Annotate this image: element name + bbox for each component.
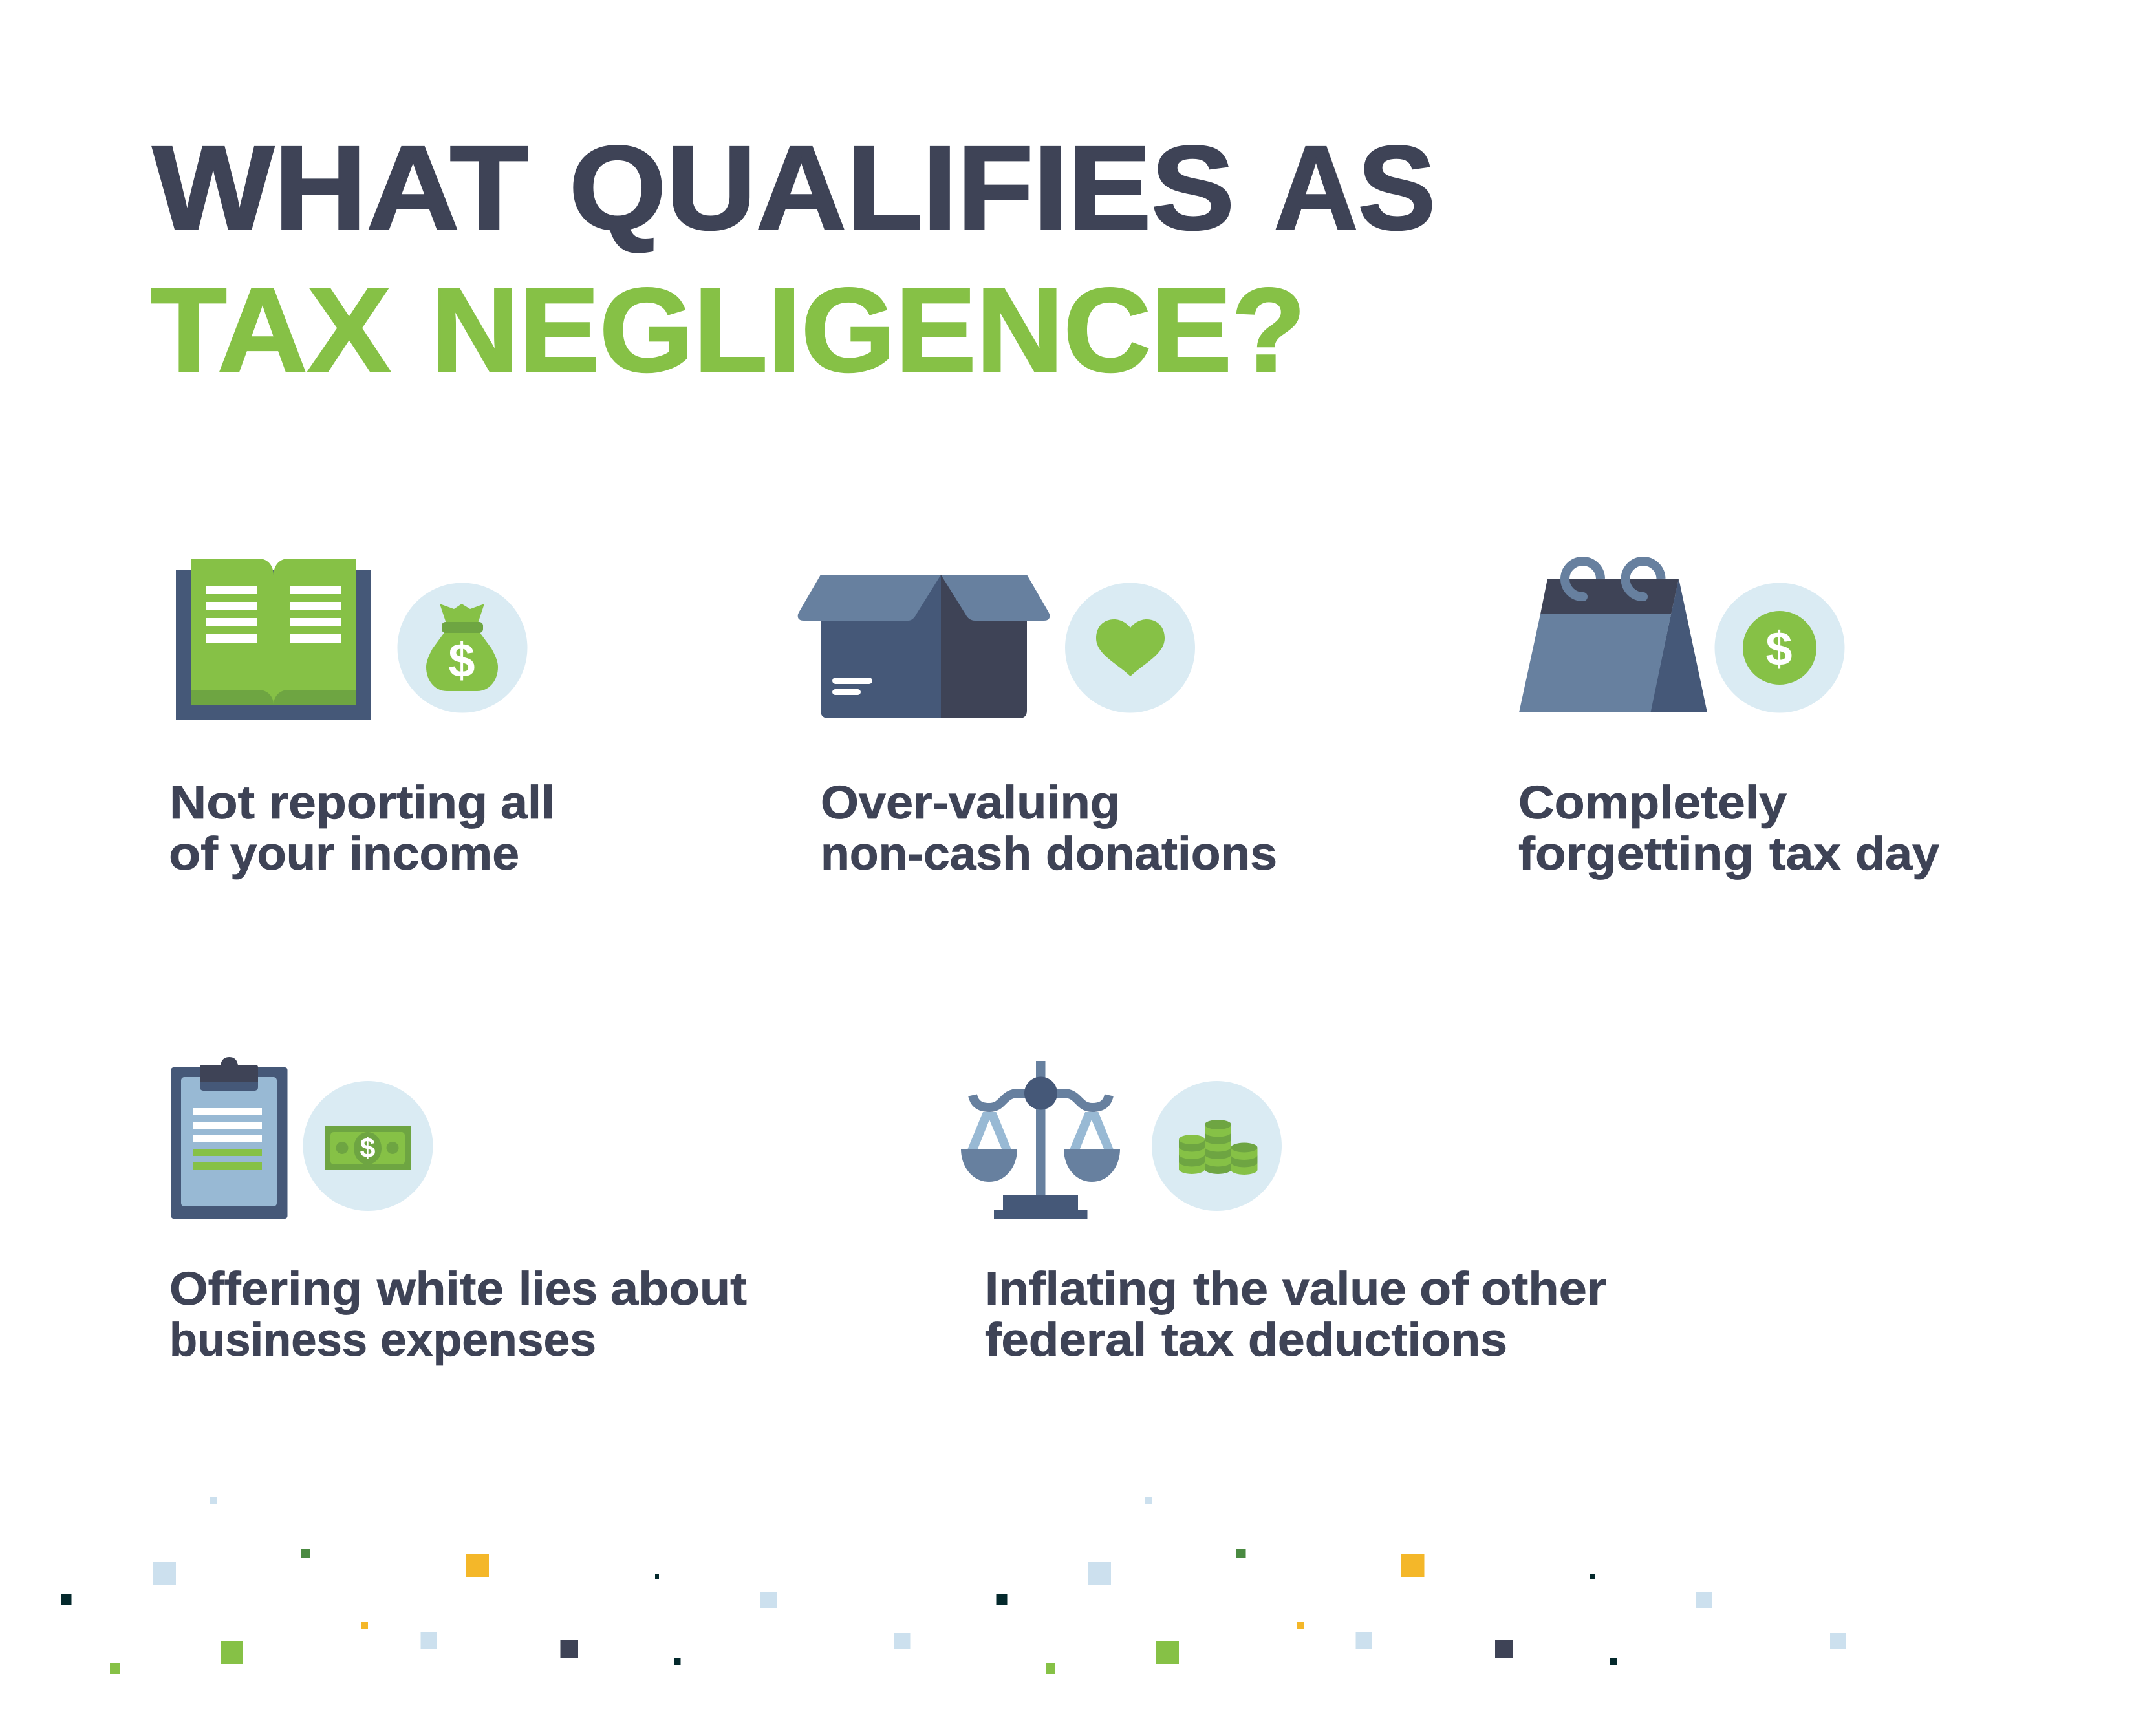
icon: dollar coin in circle: $: [1765, 622, 1793, 676]
icon: money bag in circle: $: [448, 634, 475, 687]
label: inflating the value of other federal tax deductions: tax: [1161, 1314, 1234, 1366]
label: completely forgetting tax day: [1518, 776, 1939, 880]
icon: dollar bill in circle: [303, 1081, 433, 1211]
label: inflating the value of other federal tax deductions: of: [1419, 1263, 1469, 1315]
label: over-valuing non-cash donations: non-cash: [821, 828, 1031, 880]
panel: forgetting tax day: [1518, 561, 1939, 880]
icon: balance scale: [961, 1061, 1120, 1219]
label: inflating the value of other federal tax deductions: other: [1481, 1263, 1606, 1315]
coin stack 3: [1231, 1143, 1257, 1175]
label: completely forgetting tax day: day: [1855, 828, 1939, 880]
icon: dollar bill in circle: $: [360, 1133, 376, 1164]
confetti squares: [61, 1497, 1846, 1674]
title line 1: [153, 121, 1436, 254]
icon: coin stacks in circle: [1152, 1081, 1282, 1211]
icon: dollar coin in circle: [1715, 583, 1844, 712]
label: completely forgetting tax day: tax: [1769, 828, 1841, 880]
label: offering white lies about business expenses: white: [376, 1263, 504, 1315]
icon: money bag in circle: [397, 583, 528, 712]
label: inflating the value of other federal tax deductions: deductions: [1248, 1314, 1507, 1366]
label: not reporting all of your income: Not: [169, 776, 255, 829]
coin stack 1: [1179, 1135, 1205, 1174]
label: over-valuing non-cash donations: donations: [1046, 828, 1277, 880]
label: inflating the value of other federal tax deductions: the: [1193, 1263, 1268, 1315]
label: over-valuing non-cash donations: Over-valuing: [821, 776, 1120, 829]
label: offering white lies about business expenses: about: [610, 1263, 747, 1315]
coin stack 2: [1205, 1120, 1231, 1174]
icon: clipboard: [171, 1057, 287, 1219]
label: not reporting all of your income: all: [501, 776, 555, 829]
icon: desk calendar: [1519, 561, 1707, 712]
title line 1: WHAT: [153, 121, 528, 254]
label: over-valuing non-cash donations: [821, 776, 1277, 880]
panel: white lies about business expenses: [169, 1057, 747, 1366]
panel: over-valuing donations: [798, 575, 1277, 880]
label: offering white lies about business expenses: [169, 1263, 747, 1366]
label: inflating the value of other federal tax deductions: value: [1282, 1263, 1407, 1315]
title line 2: NEGLIGENCE?: [431, 263, 1306, 396]
title line 1: AS: [1274, 121, 1436, 254]
icon: open book: [176, 559, 371, 720]
label: completely forgetting tax day: Completely: [1518, 776, 1787, 829]
label: completely forgetting tax day: forgetting: [1518, 828, 1754, 880]
label: offering white lies about business expenses: expenses: [380, 1314, 596, 1366]
label: not reporting all of your income: reporting: [269, 776, 488, 829]
label: not reporting all of your income: of: [169, 828, 219, 880]
title line 1: QUALIFIES: [569, 121, 1234, 254]
icon: heart in circle: [1065, 583, 1195, 712]
panel: not reporting income: [169, 559, 555, 880]
label: offering white lies about business expenses: lies: [519, 1263, 598, 1315]
label: inflating the value of other federal tax deductions: Inflating: [985, 1263, 1178, 1315]
label: inflating the value of other federal tax deductions: [985, 1263, 1606, 1366]
icon: cardboard box: [798, 575, 1050, 718]
title: [151, 121, 1436, 396]
label: not reporting all of your income: [169, 776, 555, 880]
label: not reporting all of your income: income: [349, 828, 519, 880]
label: offering white lies about business expenses: business: [169, 1314, 367, 1366]
label: inflating the value of other federal tax deductions: federal: [985, 1314, 1147, 1366]
label: offering white lies about business expenses: Offering: [169, 1263, 362, 1315]
panel: inflating federal tax deductions: [961, 1061, 1606, 1366]
label: not reporting all of your income: your: [230, 828, 334, 880]
title line 2: TAX: [151, 263, 391, 396]
